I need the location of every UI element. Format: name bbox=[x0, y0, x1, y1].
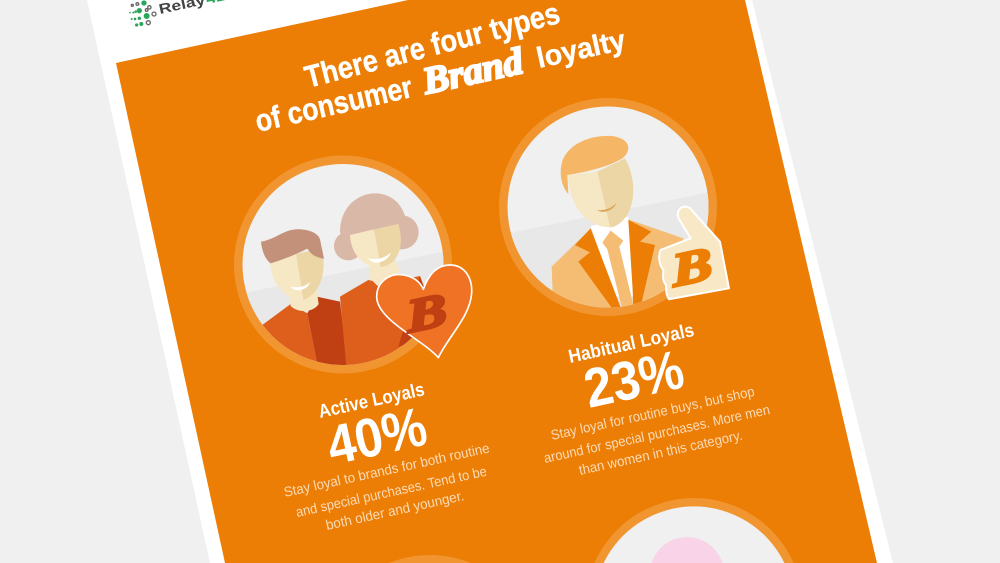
illustration: couple with heart bbox=[234, 156, 473, 374]
man's head bbox=[261, 229, 324, 311]
panel: habitual loyals bbox=[495, 98, 771, 478]
logo: Relay42 bbox=[129, 0, 227, 27]
panel: active loyals bbox=[230, 156, 491, 533]
description: Stay loyal for routine buys, but shop bbox=[549, 383, 756, 443]
stat: 40%: 40% bbox=[321, 395, 432, 477]
description: Stay loyal to brands for both routine bbox=[282, 440, 491, 500]
woman's head bbox=[334, 193, 419, 287]
icon: foam hand with B bbox=[659, 207, 729, 299]
description: both older and younger. bbox=[324, 487, 465, 533]
description bbox=[542, 383, 771, 478]
title: Brand bbox=[418, 40, 528, 103]
description: than women in this category. bbox=[577, 427, 744, 478]
suit bbox=[552, 217, 683, 310]
title: loyalty bbox=[534, 24, 628, 75]
icon: foam hand with B: B bbox=[668, 237, 715, 297]
illustration: man with foam hand bbox=[495, 98, 729, 330]
man's body bbox=[262, 296, 348, 365]
title: of consumer bbox=[252, 69, 416, 139]
description: and special purchases. Tend to be bbox=[294, 463, 488, 520]
title bbox=[252, 0, 628, 139]
icon: heart with B bbox=[377, 265, 472, 358]
heading: Habitual Loyals: Habitual Loyals bbox=[567, 320, 696, 368]
head bbox=[561, 136, 633, 227]
heading: Active Loyals: Active Loyals bbox=[317, 379, 427, 423]
panel: fourth loyalty type (cropped) bbox=[594, 498, 794, 563]
orange panel bbox=[116, 0, 877, 563]
panel: third loyalty type (cropped) bbox=[389, 555, 471, 563]
icon: heart with B: B bbox=[403, 283, 449, 343]
description: around for special purchases. More men bbox=[542, 401, 771, 466]
stat: 23%: 23% bbox=[578, 338, 689, 420]
woman's body bbox=[340, 276, 424, 365]
description bbox=[282, 440, 491, 533]
